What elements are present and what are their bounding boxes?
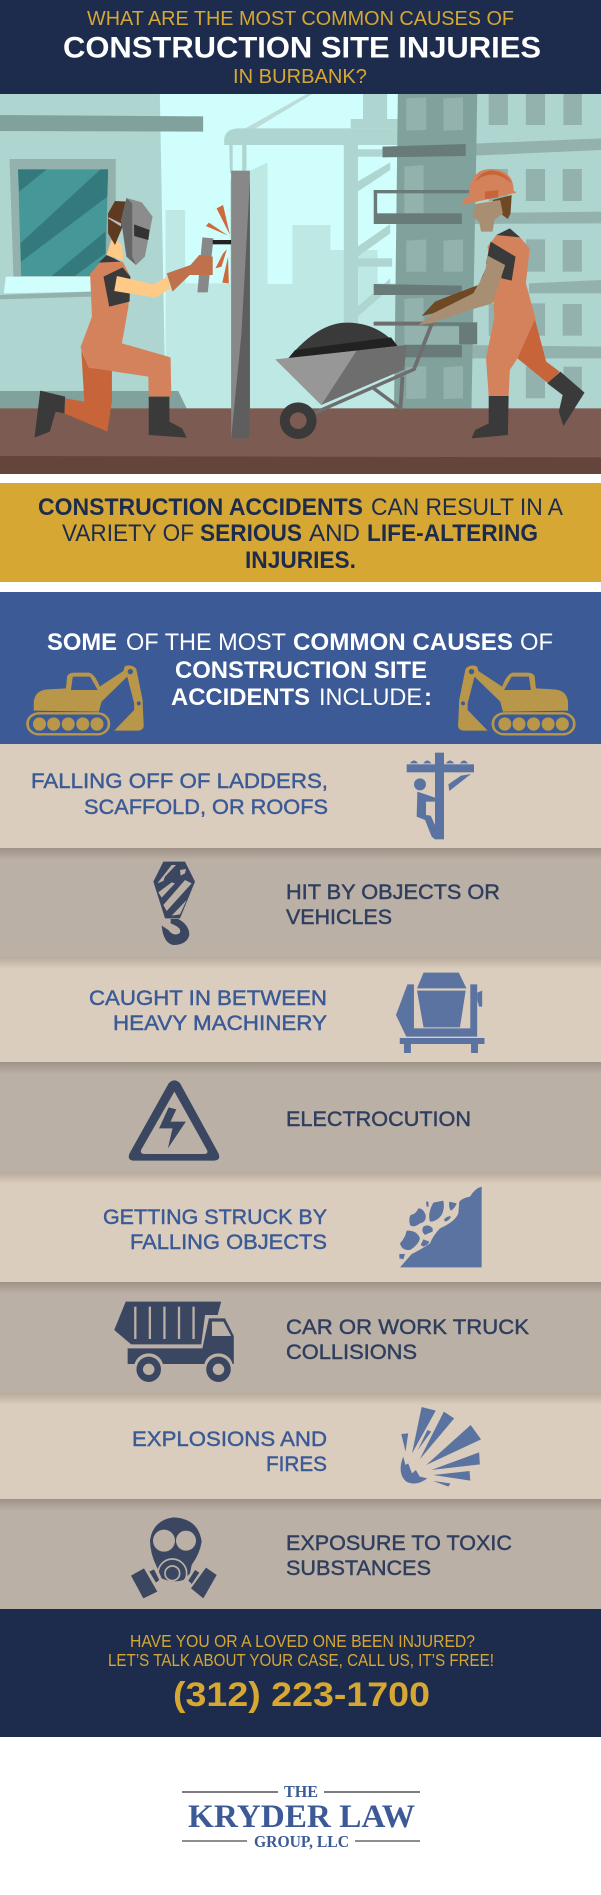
- callout: gold statement: LIFE-ALTERING: [367, 520, 538, 547]
- icon: dump truck: [114, 1302, 234, 1382]
- logo: The Kryder Law Group: GROUP, LLC: [254, 1832, 349, 1851]
- icon: gas mask: [131, 1517, 217, 1598]
- icon: high voltage warning: [129, 1080, 219, 1161]
- icon: cement mixer: [396, 973, 484, 1053]
- panel: falling off ladders: [0, 744, 601, 848]
- icon: rockslide: [399, 1187, 482, 1267]
- callout: gold statement: INJURIES.: [245, 547, 356, 574]
- panel: toxic substances: EXPOSURE TO TOXIC: [286, 1531, 512, 1555]
- call to action panel: (312) 223-1700: [173, 1676, 430, 1714]
- panel: toxic substances: SUBSTANCES: [286, 1556, 431, 1580]
- panel: struck by falling objects: GETTING STRUCK BY: [103, 1205, 327, 1229]
- panel: electrocution: ELECTROCUTION: [286, 1107, 471, 1131]
- panel: toxic substances: [0, 1499, 601, 1609]
- title banner: WHAT ARE THE MOST COMMON CAUSES OF: [87, 7, 514, 30]
- callout: gold statement: SERIOUS: [200, 520, 302, 547]
- panel: explosions and fires: [0, 1393, 601, 1499]
- callout: gold statement: [0, 483, 601, 582]
- call to action panel: [0, 1609, 601, 1737]
- callout: gold statement: CONSTRUCTION ACCIDENTS: [38, 494, 363, 521]
- icon: explosion: [401, 1407, 481, 1487]
- panel: struck by falling objects: FALLING OBJECTS: [130, 1230, 327, 1254]
- panel: explosions and fires: EXPLOSIONS AND: [132, 1427, 327, 1451]
- panel: common causes heading: OF: [520, 629, 553, 656]
- icon: crane hook: [153, 862, 195, 945]
- panel: hit by objects: [0, 848, 601, 957]
- callout: gold statement: CAN RESULT IN A: [371, 494, 563, 521]
- panel: caught in machinery: [0, 957, 601, 1062]
- panel: struck by falling objects: [0, 1172, 601, 1282]
- icon: excavator left: [28, 665, 144, 734]
- panel: falling off ladders: FALLING OFF OF LADDERS,: [31, 769, 328, 793]
- panel: electrocution: [0, 1062, 601, 1172]
- panel: common causes heading: ACCIDENTS: [171, 684, 310, 711]
- panel: caught in machinery: HEAVY MACHINERY: [113, 1011, 327, 1035]
- callout: gold statement: VARIETY OF: [62, 520, 194, 547]
- panel: hit by objects: HIT BY OBJECTS OR: [286, 880, 500, 904]
- panel: common causes heading: :: [424, 684, 432, 711]
- title banner: [0, 0, 601, 94]
- panel: truck collisions: CAR OR WORK TRUCK: [286, 1315, 530, 1339]
- illustration: construction workers on site: [0, 94, 601, 474]
- wheelbarrow: [275, 323, 432, 439]
- panel: common causes heading: OF THE MOST: [126, 629, 286, 656]
- title banner: IN BURBANK?: [233, 65, 367, 88]
- welder figure: [34, 198, 231, 438]
- panel: truck collisions: [0, 1282, 601, 1393]
- icon: utility pole climber: [407, 753, 474, 839]
- panel: truck collisions: COLLISIONS: [286, 1340, 417, 1364]
- steel post: [231, 171, 250, 438]
- callout: gold statement: AND: [309, 520, 360, 547]
- title banner: CONSTRUCTION SITE INJURIES: [63, 32, 541, 64]
- panel: hit by objects: VEHICLES: [286, 905, 392, 929]
- logo: The Kryder Law Group: [182, 1782, 420, 1851]
- panel: falling off ladders: SCAFFOLD, OR ROOFS: [84, 795, 328, 819]
- call to action panel: HAVE YOU OR A LOVED ONE BEEN INJURED?: [130, 1631, 475, 1651]
- panel: common causes heading: CONSTRUCTION SITE: [175, 657, 427, 684]
- panel: caught in machinery: CAUGHT IN BETWEEN: [89, 986, 327, 1010]
- panel: common causes heading: INCLUDE: [319, 684, 422, 711]
- panel: common causes heading: SOME: [47, 629, 117, 656]
- icon: excavator right: [458, 665, 574, 734]
- panel: common causes heading: [0, 592, 601, 744]
- panel: explosions and fires: FIRES: [266, 1452, 327, 1476]
- logo: The Kryder Law Group: KRYDER LAW: [188, 1799, 415, 1835]
- panel: common causes heading: COMMON CAUSES: [293, 629, 513, 656]
- logo: The Kryder Law Group: THE: [284, 1782, 318, 1801]
- worker with helmet: [419, 169, 585, 438]
- call to action panel: LET’S TALK ABOUT YOUR CASE, CALL US, IT’S FREE!: [108, 1650, 494, 1670]
